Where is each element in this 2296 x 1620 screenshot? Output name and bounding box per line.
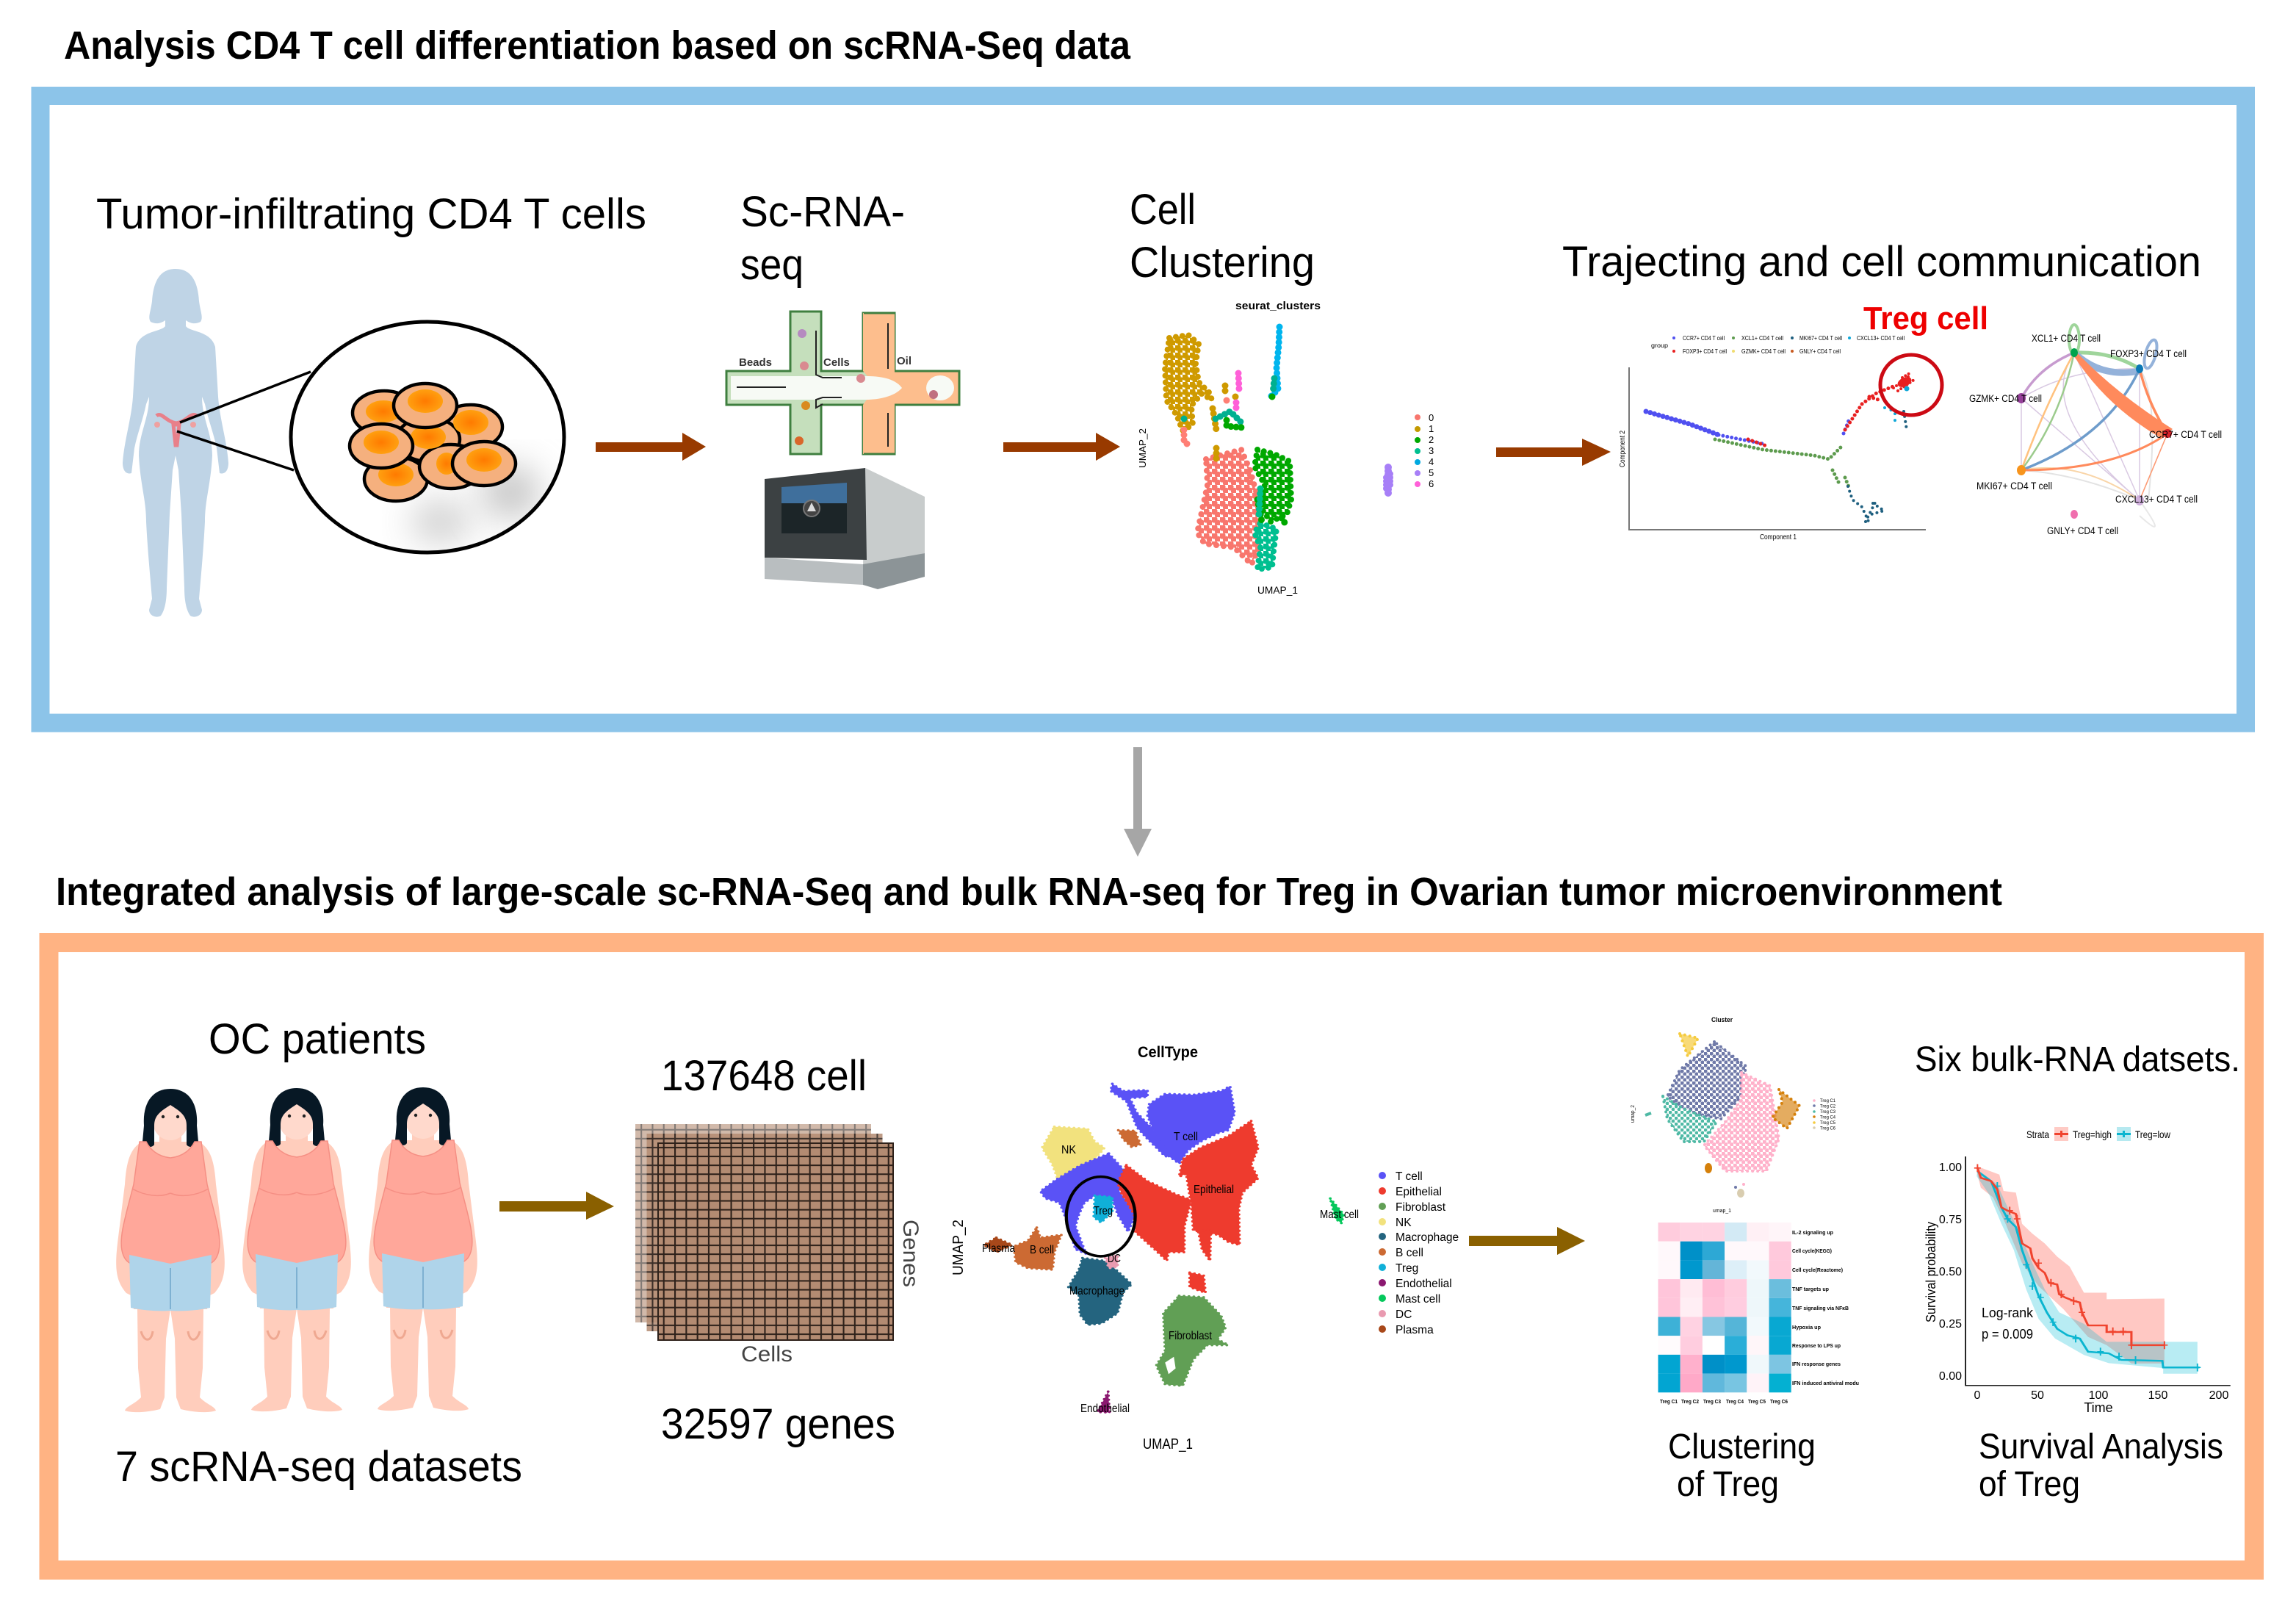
chart: Treg pathway heatmap: Treg C4 xyxy=(1726,1400,1744,1405)
icon: woman silhouette with uterus xyxy=(123,269,228,617)
chart: survival curve: 1.00 xyxy=(1939,1162,1962,1174)
arrow: patients to matrix xyxy=(499,1192,614,1220)
chart: CellType UMAP: B cell xyxy=(1396,1247,1423,1259)
icon: sequencing instrument xyxy=(765,468,925,589)
icon: microfluidic chip xyxy=(726,312,959,454)
icon: magnified tumor cell cluster xyxy=(177,322,564,552)
chart: Treg pathway heatmap: Treg C1 xyxy=(1660,1400,1678,1405)
chart: Treg pathway heatmap xyxy=(1658,1223,1859,1405)
chart: CellType UMAP: Treg xyxy=(1396,1262,1418,1275)
chart: CellType UMAP: Mast cell xyxy=(1320,1209,1359,1221)
chart: Treg cluster UMAP: umap_2 xyxy=(1631,1105,1636,1123)
chart: pseudotime trajectory: Component 1 xyxy=(1760,533,1797,541)
label: survival analysis of Treg xyxy=(1979,1428,2223,1504)
chart: seurat clusters UMAP: seurat_clusters xyxy=(1235,300,1321,312)
chart: survival curve: 0.25 xyxy=(1939,1318,1962,1331)
chart: CellType UMAP: Plasma xyxy=(982,1242,1015,1255)
chart: Treg pathway heatmap: TNF signaling via NFκB xyxy=(1792,1305,1849,1311)
chart: survival curve: Time xyxy=(2084,1400,2113,1415)
panel: CD4 T cell analysis frame xyxy=(40,96,2246,723)
chart: seurat clusters UMAP: 6 xyxy=(1429,478,1434,489)
chart: survival curve xyxy=(1924,1127,2231,1415)
chart: Treg pathway heatmap: IFN response genes xyxy=(1792,1361,1841,1367)
chart: survival curve: Treg=low xyxy=(2135,1128,2171,1140)
chart: survival curve: 0.50 xyxy=(1939,1266,1962,1278)
chart: survival curve: 0 xyxy=(1974,1389,1981,1402)
chart: CellType UMAP: Fibroblast xyxy=(1169,1330,1212,1342)
icon: microfluidic chip: Beads xyxy=(739,356,772,369)
panel: Treg integrated analysis frame xyxy=(48,943,2254,1570)
chart: cell communication network xyxy=(1969,325,2222,536)
chart: Treg pathway heatmap: TNF targets up xyxy=(1792,1286,1829,1292)
chart: Treg cluster UMAP: umap_1 xyxy=(1713,1209,1731,1214)
chart: CellType UMAP: Epithelial xyxy=(1194,1184,1234,1196)
chart: Treg pathway heatmap: Cell cycle(KEGG) xyxy=(1792,1248,1832,1254)
heading: analysis of CD4 T cells: Analysis CD4 T cell differentiation based on scRNA-Seq data xyxy=(64,24,1131,68)
chart: seurat clusters UMAP xyxy=(1137,300,1434,596)
chart: CellType UMAP: B cell xyxy=(1030,1244,1054,1256)
arrow: clustering to trajectory xyxy=(1496,439,1611,466)
label: clustering of Treg: of Treg xyxy=(1677,1465,1779,1504)
chart: survival curve: 200 xyxy=(2209,1389,2228,1402)
chart: Treg pathway heatmap: Response to LPS up xyxy=(1792,1342,1841,1349)
label: 32597 genes: 32597 genes xyxy=(661,1400,895,1448)
label: six bulk-RNA datasets: Six bulk-RNA datsets. xyxy=(1915,1040,2240,1079)
chart: pseudotime trajectory: CCR7+ CD4 T cell xyxy=(1683,335,1725,342)
chart: cell communication network: GNLY+ CD4 T cell xyxy=(2047,525,2118,536)
chart: survival curve: 150 xyxy=(2148,1389,2167,1402)
arrow: cells to sequencing xyxy=(596,433,706,461)
heading: integrated analysis: Integrated analysis of large-scale sc-RNA-Seq and bulk RNA-seq for Treg in Ovarian tumor microenvironment xyxy=(56,870,2002,914)
chart: seurat clusters UMAP: 0 xyxy=(1429,412,1434,423)
chart: cell communication network: FOXP3+ CD4 T cell xyxy=(2110,348,2187,359)
chart: CellType UMAP: DC xyxy=(1108,1253,1121,1265)
chart: Treg cluster UMAP: Treg C6 xyxy=(1820,1127,1836,1131)
chart: pseudotime trajectory: MKI67+ CD4 T cell xyxy=(1799,335,1842,342)
chart: seurat clusters UMAP: 5 xyxy=(1429,467,1434,478)
chart: CellType UMAP: Macrophage xyxy=(1396,1231,1459,1244)
label: survival analysis of Treg: of Treg xyxy=(1979,1465,2080,1504)
chart: seurat clusters UMAP: 2 xyxy=(1429,434,1434,445)
chart: CellType UMAP: T cell xyxy=(1396,1170,1423,1183)
chart: survival curve: 100 xyxy=(2089,1389,2108,1402)
chart: Treg cluster UMAP: Treg C3 xyxy=(1820,1110,1836,1115)
label: 7 scRNA-seq datasets: 7 scRNA-seq datasets xyxy=(115,1443,522,1491)
chart: CellType UMAP: Endothelial xyxy=(1080,1403,1130,1415)
chart: CellType UMAP: NK xyxy=(1061,1144,1076,1156)
chart: cell communication network: MKI67+ CD4 T cell xyxy=(1976,480,2052,492)
chart: survival curve: 0.75 xyxy=(1939,1214,1962,1226)
chart: Treg pathway heatmap: Treg C3 xyxy=(1703,1400,1721,1405)
chart: Treg cluster UMAP: Treg C5 xyxy=(1820,1121,1836,1126)
chart: survival curve: 50 xyxy=(2031,1389,2044,1402)
chart: seurat clusters UMAP: 3 xyxy=(1429,445,1434,456)
chart: Treg cluster UMAP: Treg C4 xyxy=(1820,1115,1836,1120)
icon: microfluidic chip: Oil xyxy=(897,355,911,367)
label: tumor-infiltrating CD4 T cells: Tumor-infiltrating CD4 T cells xyxy=(96,190,646,238)
chart: pseudotime trajectory xyxy=(1618,335,1942,541)
chart: Treg cluster UMAP: Cluster xyxy=(1711,1016,1733,1023)
chart: CellType UMAP: Plasma xyxy=(1396,1324,1434,1336)
chart: survival curve: Log-rank xyxy=(1982,1306,2034,1320)
chart: pseudotime trajectory: Component 2 xyxy=(1618,431,1627,467)
label: 137648 cell: 137648 cell xyxy=(661,1052,867,1100)
chart: Treg cluster UMAP: Treg C2 xyxy=(1820,1105,1836,1109)
chart: CellType UMAP: Epithelial xyxy=(1396,1186,1442,1198)
label: clustering of Treg xyxy=(1668,1428,1816,1504)
label: OC patients: OC patients xyxy=(209,1015,426,1063)
chart: survival curve: 0.00 xyxy=(1939,1370,1962,1383)
chart: CellType UMAP: Macrophage xyxy=(1069,1285,1124,1297)
arrow: gray down arrow between panels xyxy=(1124,747,1152,857)
chart: expression matrix: Cells xyxy=(741,1342,793,1367)
chart: expression matrix xyxy=(635,1124,923,1367)
icon: three OC patients xyxy=(116,1087,477,1412)
chart: pseudotime trajectory: group xyxy=(1651,342,1669,349)
chart: cell communication network: CCR7+ CD4 T cell xyxy=(2149,429,2222,440)
chart: Treg pathway heatmap: IL-2 signaling up xyxy=(1792,1229,1833,1236)
chart: Treg cluster UMAP xyxy=(1631,1016,1836,1214)
label: Sc-RNA-seq xyxy=(740,188,905,289)
label: Sc-RNA-seq: seq xyxy=(740,241,804,289)
chart: CellType UMAP: UMAP_1 xyxy=(1143,1436,1193,1452)
chart: CellType UMAP: UMAP_2 xyxy=(950,1220,967,1275)
chart: survival curve: Survival probability xyxy=(1924,1222,1938,1322)
chart: pseudotime trajectory: GZMK+ CD4 T cell xyxy=(1741,348,1786,355)
chart: Treg pathway heatmap: Treg C5 xyxy=(1748,1400,1766,1405)
arrow: sequencing to clustering xyxy=(1003,433,1120,461)
chart: cell communication network: GZMK+ CD4 T cell xyxy=(1969,393,2042,404)
label: trajecting and cell communication: Trajecting and cell communication xyxy=(1562,238,2201,286)
chart: CellType UMAP: Fibroblast xyxy=(1396,1201,1446,1214)
label: clustering of Treg: Clustering xyxy=(1668,1428,1816,1466)
chart: seurat clusters UMAP: 1 xyxy=(1429,423,1434,434)
chart: CellType UMAP: CellType xyxy=(1138,1044,1198,1061)
arrow: UMAP to Treg clustering xyxy=(1469,1227,1585,1255)
label: Sc-RNA-seq: Sc-RNA- xyxy=(740,188,905,236)
chart: pseudotime trajectory: CXCL13+ CD4 T cell xyxy=(1857,335,1905,342)
chart: seurat clusters UMAP: UMAP_2 xyxy=(1137,428,1148,468)
chart: seurat clusters UMAP: 4 xyxy=(1429,456,1434,467)
label: Cell Clustering xyxy=(1130,186,1315,287)
label: Cell Clustering: Clustering xyxy=(1130,239,1315,287)
chart: expression matrix: Genes xyxy=(898,1220,923,1287)
chart: CellType UMAP: Treg xyxy=(1094,1205,1113,1217)
chart: Treg pathway heatmap: Treg C2 xyxy=(1681,1400,1699,1405)
chart: survival curve: Treg=high xyxy=(2073,1128,2112,1140)
chart: pseudotime trajectory: XCL1+ CD4 T cell xyxy=(1741,335,1783,342)
chart: pseudotime trajectory: FOXP3+ CD4 T cell xyxy=(1683,348,1727,355)
icon: microfluidic chip: Cells xyxy=(823,356,850,369)
chart: survival curve: Strata xyxy=(2026,1128,2049,1140)
chart: cell communication network: XCL1+ CD4 T cell xyxy=(2032,333,2101,344)
chart: CellType UMAP: Endothelial xyxy=(1396,1278,1452,1290)
chart: cell communication network: CXCL13+ CD4 T cell xyxy=(2115,494,2198,505)
chart: survival curve: p = 0.009 xyxy=(1982,1327,2033,1342)
callout: Treg cell: Treg cell xyxy=(1863,300,1988,336)
label: survival analysis of Treg: Survival Analysis xyxy=(1979,1428,2223,1466)
chart: CellType UMAP: T cell xyxy=(1174,1131,1198,1143)
chart: seurat clusters UMAP: UMAP_1 xyxy=(1257,584,1298,596)
label: Cell Clustering: Cell xyxy=(1130,186,1196,234)
chart: CellType UMAP: NK xyxy=(1396,1217,1412,1229)
chart: Treg cluster UMAP: Treg C1 xyxy=(1820,1099,1836,1104)
chart: pseudotime trajectory: GNLY+ CD4 T cell xyxy=(1799,348,1841,355)
chart: Treg pathway heatmap: Hypoxia up xyxy=(1792,1324,1821,1331)
chart: CellType UMAP: DC xyxy=(1396,1308,1412,1321)
chart: Treg pathway heatmap: Treg C6 xyxy=(1770,1400,1788,1405)
chart: Treg pathway heatmap: IFN induced antiviral modu xyxy=(1792,1380,1859,1386)
chart: Treg pathway heatmap: Cell cycle(Reactome) xyxy=(1792,1267,1843,1273)
chart: CellType UMAP xyxy=(950,1044,1459,1452)
chart: CellType UMAP: Mast cell xyxy=(1396,1293,1440,1306)
